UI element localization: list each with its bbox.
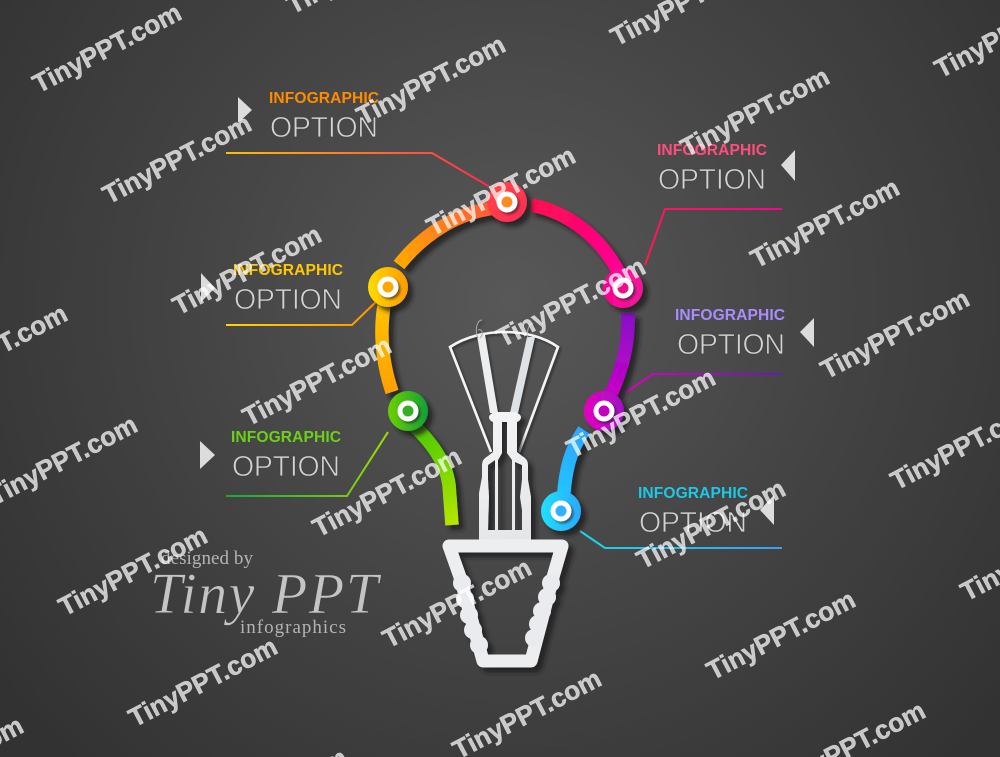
watermarks: TinyPPT.com — [378, 552, 536, 654]
watermarks: TinyPPT.com — [54, 520, 212, 622]
filament left band — [477, 335, 498, 413]
bulb base — [449, 546, 562, 661]
connector lines — [226, 153, 782, 548]
base outline — [449, 546, 562, 661]
node: red — [487, 182, 527, 222]
base screw thread — [453, 574, 560, 654]
filament curls — [476, 320, 533, 338]
label: green option: INFOGRAPHIC — [231, 429, 341, 446]
light bulb ring segments — [382, 205, 628, 525]
label: orange option: OPTION — [270, 112, 378, 144]
filament — [450, 320, 558, 452]
watermarks: TinyPPT.com — [124, 631, 282, 733]
label: purple option — [675, 307, 785, 361]
watermarks: TinyPPT.com — [492, 251, 650, 353]
label: blue option: OPTION — [639, 507, 747, 539]
logo caption top: designed by — [161, 548, 254, 569]
watermarks: TinyPPT.com — [168, 219, 326, 321]
logo caption bottom: infographics — [240, 617, 346, 638]
label: orange option — [269, 90, 379, 144]
label: purple option: INFOGRAPHIC — [675, 307, 785, 324]
triangle markers — [200, 97, 814, 525]
watermarks: TinyPPT.com — [562, 362, 720, 464]
node: green — [388, 391, 428, 431]
label: yellow option — [233, 262, 343, 316]
watermarks: TinyPPT.com — [98, 108, 256, 210]
filament right band — [510, 337, 535, 413]
label: green option — [231, 429, 341, 483]
watermarks: TinyPPT.com — [422, 140, 580, 242]
watermarks: TinyPPT.com — [352, 29, 510, 131]
watermarks: TinyPPT.com — [238, 330, 396, 432]
label: green option: OPTION — [232, 451, 340, 483]
label: blue option — [638, 485, 748, 539]
watermarks: TinyPPT.com — [632, 473, 790, 575]
watermarks: TinyPPT.com — [676, 61, 834, 163]
label: pink option — [657, 142, 767, 196]
label: pink option: OPTION — [658, 164, 766, 196]
watermarks: TinyPPT.com — [308, 441, 466, 543]
label: orange option: INFOGRAPHIC — [269, 90, 379, 107]
watermarks: TinyPPT.com — [746, 172, 904, 274]
label: pink option: INFOGRAPHIC — [657, 142, 767, 159]
watermarks: TinyPPT.com — [702, 584, 860, 686]
filament wires — [450, 332, 558, 452]
logo script name: Tiny PPT — [150, 561, 382, 626]
label: purple option: OPTION — [677, 329, 785, 361]
designer logo — [150, 548, 382, 638]
node: purple — [584, 391, 624, 431]
label: yellow option: INFOGRAPHIC — [233, 262, 343, 279]
node: pink — [603, 268, 643, 308]
bulb stem — [479, 412, 531, 540]
watermarks: TinyPPT.com — [816, 283, 974, 385]
node: yellow — [368, 267, 408, 307]
label: blue option: INFOGRAPHIC — [638, 485, 748, 502]
node: blue — [541, 491, 581, 531]
label: yellow option: OPTION — [234, 284, 342, 316]
watermarks: TinyPPT.com — [28, 0, 186, 99]
